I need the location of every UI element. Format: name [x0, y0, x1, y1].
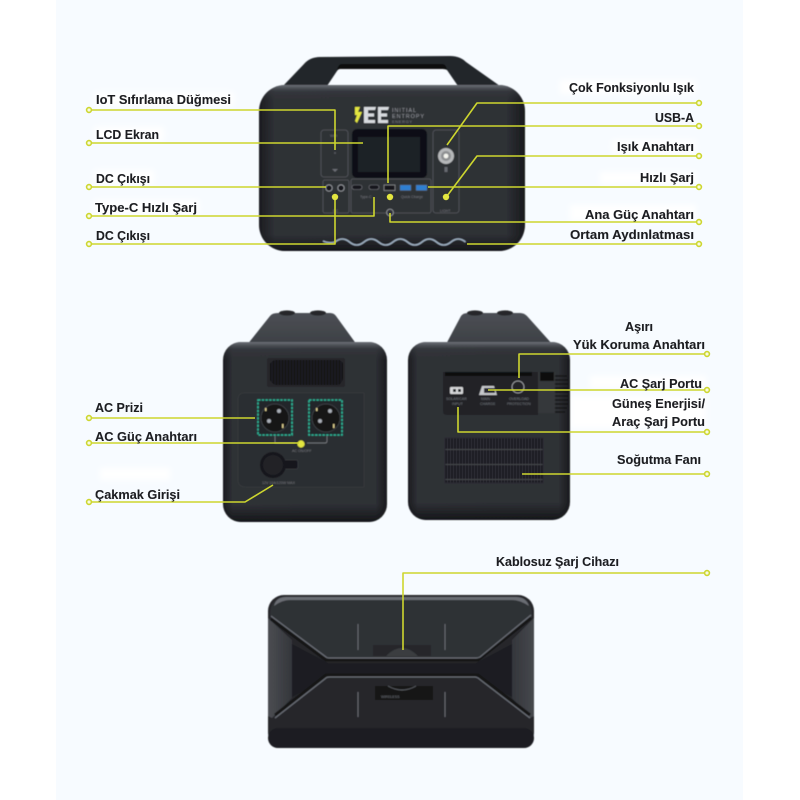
device: rear view left	[223, 310, 387, 522]
reset box	[321, 130, 348, 177]
AC socket left	[258, 400, 292, 435]
callout: Işık Anahtarı	[443, 139, 701, 200]
callout: AC Güç Anahtarı: AC Güç Anahtarı	[95, 429, 197, 444]
vent	[267, 358, 345, 387]
callout: USB-A	[387, 110, 701, 200]
callout: Aşırı Yük Koruma Anahtarı	[519, 319, 709, 378]
USB panel: Quick Charge	[401, 195, 423, 199]
LCD screen	[352, 129, 427, 178]
callout: Type-C Hızlı Şarj	[87, 197, 374, 218]
callout: Çakmak Girişi	[87, 485, 273, 504]
cigarette lighter port	[260, 452, 298, 485]
callout: DC Çıkışı upper	[87, 171, 326, 189]
callout: DC Çıkışı lower: DC Çıkışı	[96, 228, 150, 243]
device: rear view right	[408, 310, 570, 520]
light panel: LIGHT	[440, 209, 451, 213]
carry knobs	[279, 310, 326, 316]
reset box: WiFi	[330, 134, 337, 138]
top trapezoid	[243, 313, 357, 350]
callout: Kablosuz Şarj Cihazı	[403, 554, 709, 650]
ambient light strip	[323, 239, 466, 245]
callout: Type-C Hızlı Şarj: Type-C Hızlı Şarj	[95, 200, 197, 215]
handle opening rim	[337, 64, 447, 71]
socket plate	[238, 393, 364, 487]
callout: AC Şarj Portu: AC Şarj Portu	[620, 376, 702, 391]
callout: Aşırı Yük Koruma Anahtarı: Aşırı	[625, 319, 653, 334]
device: front view	[259, 56, 525, 251]
cigarette lighter port: 12V 10A/120W MAX	[262, 481, 296, 485]
side wings	[268, 618, 292, 718]
X brace	[292, 644, 512, 697]
cooling fan	[445, 438, 543, 483]
callout: Çakmak Girişi: Çakmak Girişi	[95, 487, 180, 502]
callout: Güneş Enerjisi / Araç Şarj Portu	[458, 396, 709, 434]
callout: Ana Güç Anahtarı: Ana Güç Anahtarı	[585, 207, 694, 222]
light panel	[433, 130, 459, 213]
lower face	[268, 677, 534, 748]
callout: AC Prizi	[87, 400, 255, 420]
bottom lip	[268, 728, 534, 748]
device: wireless charger	[268, 595, 534, 748]
label halos	[94, 80, 706, 480]
top trapezoid	[443, 313, 553, 350]
callout: AC Güç Anahtarı	[87, 429, 299, 445]
callout: Güneş Enerjisi / Araç Şarj Portu: Araç Şarj Portu	[612, 414, 705, 429]
AC switch	[275, 436, 327, 453]
port panel: OVERLOAD	[509, 397, 529, 401]
callout: Aşırı Yük Koruma Anahtarı: Yük Koruma Anahtarı	[573, 337, 705, 352]
main body	[259, 85, 525, 251]
callout: LCD Ekran: LCD Ekran	[96, 127, 159, 142]
side wing right	[512, 618, 534, 718]
body shading	[408, 342, 570, 520]
USB panel	[351, 179, 431, 213]
callout: Çok Fonksiyonlu Işık	[447, 80, 701, 145]
callout: DC Çıkışı upper: DC Çıkışı	[96, 171, 150, 186]
body	[408, 342, 570, 520]
port panel: PROTECTION	[507, 402, 531, 406]
callout: Hızlı Şarj: Hızlı Şarj	[640, 170, 694, 185]
brand name: ENTROPY	[392, 114, 424, 120]
side fins	[555, 376, 568, 412]
callout: AC Prizi: AC Prizi	[95, 400, 143, 415]
logo mark	[355, 107, 389, 123]
port panel: INPUT	[452, 402, 464, 406]
callout: IoT Sıfırlama Düğmesi: IoT Sıfırlama Düğmesi	[96, 92, 231, 107]
AC switch: AC ON/OFF	[292, 449, 312, 453]
top face	[270, 597, 532, 660]
power button	[387, 209, 393, 216]
top highlight	[274, 597, 529, 606]
callout: Kablosuz Şarj Cihazı: Kablosuz Şarj Cihazı	[496, 554, 619, 569]
X brace highlights	[271, 615, 531, 718]
callout: Ortam Aydınlatması	[467, 227, 701, 246]
carry knobs	[467, 310, 513, 316]
callout: Hızlı Şarj	[428, 170, 701, 189]
charging pad	[373, 645, 433, 700]
port panel: MAIN	[481, 397, 490, 401]
callout: Soğutma Fanı: Soğutma Fanı	[617, 452, 701, 467]
callout: Güneş Enerjisi / Araç Şarj Portu: Güneş Enerjisi/	[612, 396, 705, 411]
callout: USB-A: USB-A	[655, 110, 695, 125]
brand name: ENERGY	[392, 119, 412, 124]
callout: IoT Sıfırlama Düğmesi	[87, 92, 335, 150]
AC socket right	[309, 400, 342, 435]
notch	[538, 372, 555, 413]
callout: Ana Güç Anahtarı	[390, 207, 701, 224]
body	[268, 595, 534, 748]
body	[223, 342, 387, 522]
X brace band	[271, 618, 531, 715]
callout: Çok Fonksiyonlu Işık: Çok Fonksiyonlu Işık	[569, 80, 695, 95]
brand name	[392, 108, 424, 124]
port panel	[443, 372, 538, 415]
port panel: CHARGE	[480, 402, 496, 406]
guide lines	[358, 624, 445, 717]
callout: Işık Anahtarı: Işık Anahtarı	[617, 139, 694, 154]
USB panel: Type-C	[360, 195, 372, 199]
callout: Soğutma Fanı	[522, 452, 709, 476]
DC panel	[323, 180, 349, 213]
brand name: INITIAL	[392, 108, 416, 114]
callout: LCD Ekran	[87, 127, 363, 145]
body shading	[259, 85, 525, 251]
DC panel: DC	[333, 209, 339, 213]
body shading	[223, 342, 387, 522]
callout: AC Şarj Portu	[488, 376, 709, 392]
port panel: SOLAR/CAR	[446, 397, 467, 401]
handle	[283, 56, 500, 86]
charging pad: WIRELESS	[381, 695, 400, 699]
callout: Ortam Aydınlatması: Ortam Aydınlatması	[570, 227, 694, 242]
callout: DC Çıkışı lower	[87, 194, 338, 246]
